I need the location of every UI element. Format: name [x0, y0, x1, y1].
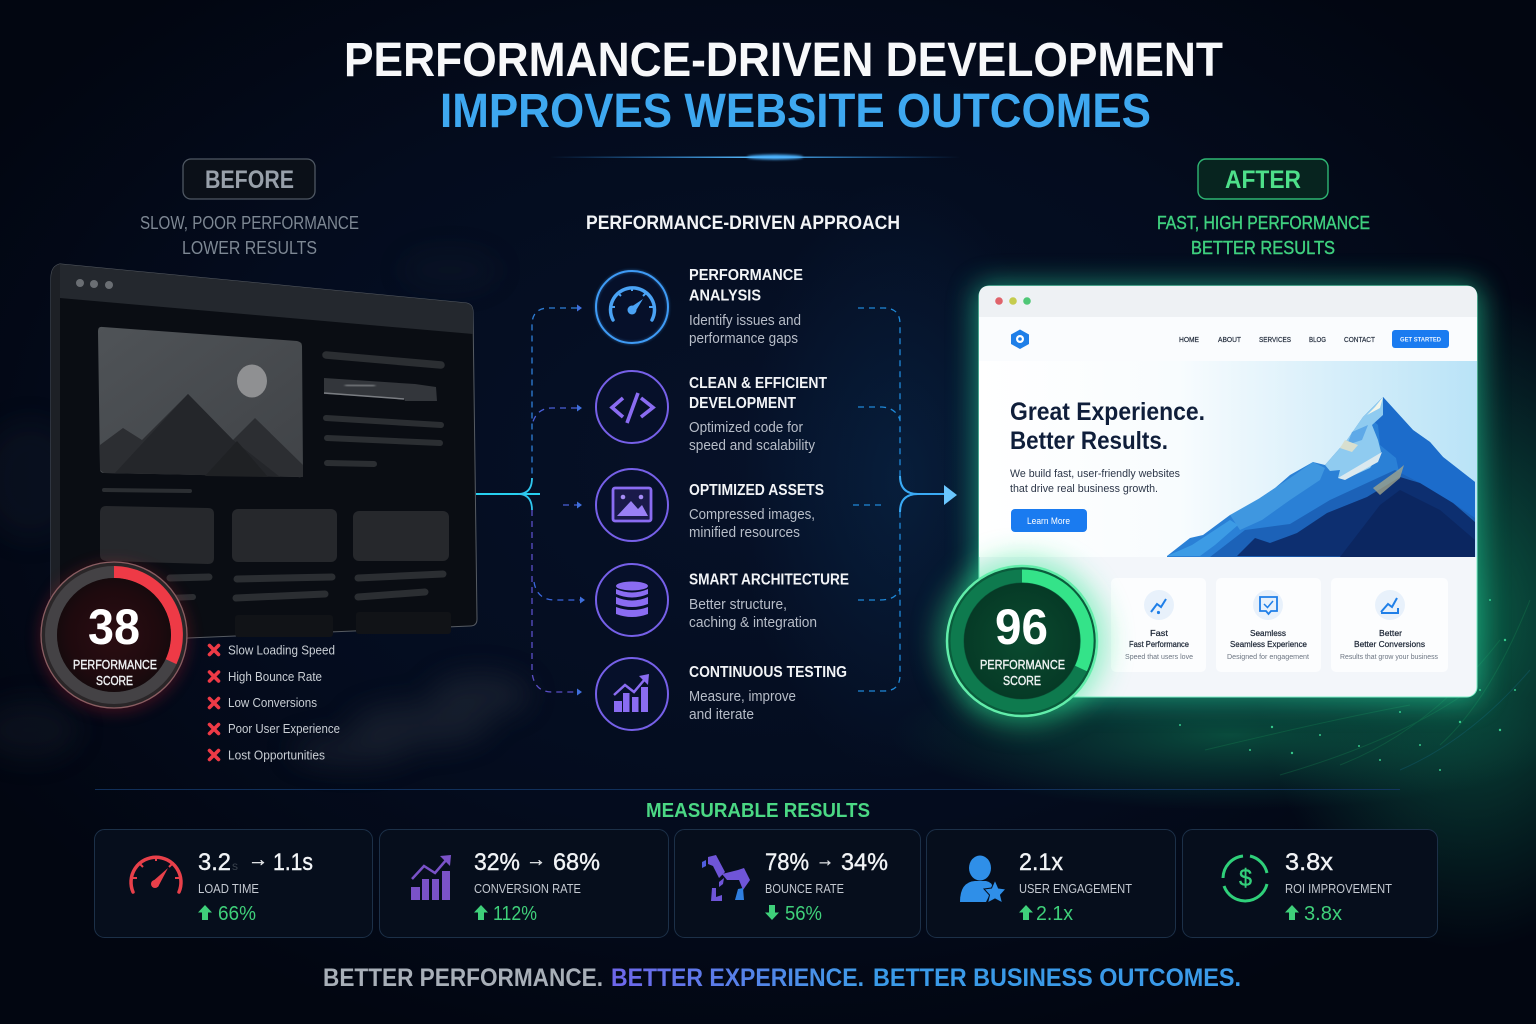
- metric: roi improvement: 3.8x: [1304, 903, 1342, 925]
- before score gauge: SCORE: [96, 673, 133, 688]
- before subtitle: LOWER RESULTS: [182, 238, 317, 258]
- metric: load time: 66%: [218, 903, 256, 925]
- step: clean and efficient development: speed and scalability: [689, 438, 816, 454]
- illustration: mountain: [1167, 397, 1475, 557]
- panel: after: [938, 159, 1481, 725]
- approach heading: PERFORMANCE-DRIVEN APPROACH: [586, 213, 900, 234]
- metric: load time: 3.2: [198, 849, 231, 876]
- icon: red gauge: [131, 856, 181, 892]
- icon: user with star: [960, 856, 1006, 903]
- step: clean and efficient development: Optimized code for: [689, 420, 803, 436]
- metric: conversion rate: 112%: [493, 903, 537, 925]
- footer tagline: [323, 964, 1241, 992]
- navigation: GET STARTED: [1400, 336, 1441, 344]
- metric: conversion rate: [380, 830, 668, 938]
- step: optimized assets: Compressed images,: [689, 507, 815, 523]
- before problems list: Lost Opportunities: [228, 748, 325, 762]
- feature card: better conversions: Better: [1379, 628, 1402, 638]
- before subtitle: SLOW, POOR PERFORMANCE: [140, 213, 359, 233]
- before score gauge: 38: [88, 599, 140, 655]
- step: optimized assets: [596, 469, 824, 541]
- metric: load time: [94, 830, 372, 938]
- navigation: [1179, 330, 1449, 348]
- bright website mockup: [975, 284, 1481, 702]
- hero: that drive real business growth.: [1010, 483, 1158, 495]
- connector: right bracket and arrow: [853, 308, 957, 691]
- hero: [979, 361, 1477, 557]
- icon: code: [612, 393, 653, 423]
- panel: approach: [476, 213, 957, 730]
- step: optimized assets: OPTIMIZED ASSETS: [689, 482, 824, 499]
- footer tagline: BETTER BUSINESS OUTCOMES.: [873, 964, 1241, 992]
- metric: load time: →: [248, 849, 268, 871]
- logo: [1011, 330, 1029, 349]
- feature card: seamless experience: Designed for engagement: [1227, 654, 1309, 661]
- step: continuous testing: CONTINUOUS TESTING: [689, 664, 847, 681]
- metric: user engagement: 2.1x: [1019, 849, 1063, 876]
- before problems list: Poor User Experience: [228, 722, 340, 736]
- after badge: AFTER: [1225, 166, 1301, 194]
- hero: Learn More: [1027, 516, 1070, 526]
- step: optimized assets: minified resources: [689, 525, 800, 541]
- title glow divider: [550, 154, 960, 160]
- metric: load time: s: [232, 859, 238, 873]
- step: smart architecture: Better structure,: [689, 597, 787, 613]
- dim browser mockup: [51, 264, 477, 640]
- title: IMPROVES WEBSITE OUTCOMES: [440, 85, 1151, 138]
- step: performance analysis: Identify issues and: [689, 313, 801, 329]
- metric: user engagement: USER ENGAGEMENT: [1019, 882, 1132, 896]
- step: continuous testing: and iterate: [689, 707, 754, 723]
- metric: conversion rate: 32%: [474, 849, 520, 876]
- before badge: BEFORE: [205, 166, 294, 194]
- step: clean and efficient development: CLEAN & EFFICIENT: [689, 375, 827, 392]
- step: continuous testing: [596, 658, 847, 730]
- metric: roi improvement: ROI IMPROVEMENT: [1285, 882, 1392, 896]
- after subtitle: BETTER RESULTS: [1191, 238, 1335, 258]
- title: PERFORMANCE-DRIVEN DEVELOPMENT: [344, 34, 1223, 87]
- after subtitle: FAST, HIGH PERFORMANCE: [1157, 213, 1370, 233]
- step: smart architecture: caching & integration: [689, 615, 817, 631]
- step: clean and efficient development: DEVELOPMENT: [689, 395, 796, 412]
- after score gauge: SCORE: [1003, 673, 1041, 688]
- feature card: better conversions: Better Conversions: [1354, 639, 1425, 649]
- metric: roi improvement: 3.8x: [1285, 849, 1333, 876]
- before problems list: High Bounce Rate: [228, 670, 322, 684]
- navigation: HOME: [1179, 335, 1199, 344]
- feature card: fast performance: Fast Performance: [1129, 639, 1189, 649]
- hero: Better Results.: [1010, 427, 1168, 455]
- after score gauge: PERFORMANCE: [980, 657, 1065, 672]
- step: continuous testing: Measure, improve: [689, 689, 796, 705]
- before problems list: Low Conversions: [228, 696, 317, 710]
- feature card: seamless experience: [1216, 578, 1321, 672]
- before score gauge: [40, 562, 188, 712]
- after score gauge: [938, 557, 1106, 725]
- hero: We build fast, user-friendly websites: [1010, 468, 1180, 480]
- feature card: fast performance: [1111, 578, 1206, 672]
- footer tagline: BETTER PERFORMANCE.: [323, 964, 603, 992]
- step: clean and efficient development: [596, 371, 827, 454]
- feature card: fast performance: Speed that users love: [1125, 654, 1193, 661]
- icon: dollar ring: $: [1239, 865, 1252, 892]
- icon: growth chart: [614, 674, 649, 712]
- icon: database: [616, 582, 648, 617]
- step: smart architecture: SMART ARCHITECTURE: [689, 572, 849, 588]
- metric: bounce rate: 34%: [841, 849, 888, 876]
- metric: user engagement: 2.1x: [1036, 903, 1073, 925]
- feature card: better conversions: Results that grow your business: [1340, 654, 1438, 661]
- step: performance analysis: performance gaps: [689, 331, 798, 347]
- feature card: seamless experience: Seamless: [1250, 628, 1286, 638]
- footer tagline: BETTER EXPERIENCE.: [611, 964, 864, 992]
- metric: bounce rate: 78%: [765, 849, 809, 876]
- feature card: seamless experience: Seamless Experience: [1230, 639, 1307, 649]
- metric: conversion rate: →: [526, 849, 546, 871]
- navigation: ABOUT: [1218, 335, 1241, 344]
- metric: load time: LOAD TIME: [198, 882, 259, 896]
- metric: bounce rate: 56%: [785, 903, 822, 925]
- before badge: [183, 159, 315, 199]
- metric: conversion rate: CONVERSION RATE: [474, 882, 581, 896]
- navigation: BLOG: [1309, 335, 1326, 344]
- metric: user engagement: [926, 830, 1176, 938]
- icon: bounce arrows: [702, 855, 750, 901]
- icon: purple chart: [411, 855, 451, 900]
- hero: Great Experience.: [1010, 398, 1205, 426]
- before score gauge: PERFORMANCE: [73, 657, 157, 672]
- metric: bounce rate: BOUNCE RATE: [765, 882, 844, 896]
- metric: bounce rate: [674, 830, 920, 938]
- icon: dollar ring: [1223, 856, 1267, 901]
- after score gauge: 96: [995, 599, 1048, 655]
- after badge: [1198, 159, 1328, 199]
- feature card: fast performance: Fast: [1150, 628, 1169, 638]
- before subtitle: [140, 213, 359, 258]
- results heading: MEASURABLE RESULTS: [646, 800, 870, 822]
- step: smart architecture: [596, 564, 849, 636]
- panel: measurable results: [94, 789, 1438, 938]
- metric: bounce rate: →: [816, 850, 834, 871]
- icon: gauge: [610, 287, 654, 320]
- panel: before: [40, 159, 477, 762]
- metric: load time: 1.1s: [273, 849, 313, 876]
- step: performance analysis: [596, 267, 803, 347]
- before problems list: Slow Loading Speed: [228, 644, 335, 658]
- metric: roi improvement: [1182, 830, 1438, 938]
- icon: image: [613, 488, 651, 521]
- metric: conversion rate: 68%: [553, 849, 600, 876]
- title: [344, 34, 1223, 138]
- navigation: SERVICES: [1259, 335, 1291, 344]
- step: performance analysis: PERFORMANCE: [689, 267, 803, 284]
- after subtitle: [1157, 213, 1370, 258]
- step: performance analysis: ANALYSIS: [689, 288, 761, 304]
- feature card: better conversions: [1331, 578, 1448, 672]
- before problems list: [210, 644, 340, 762]
- connector: left bracket: [476, 304, 585, 696]
- navigation: CONTACT: [1344, 335, 1375, 344]
